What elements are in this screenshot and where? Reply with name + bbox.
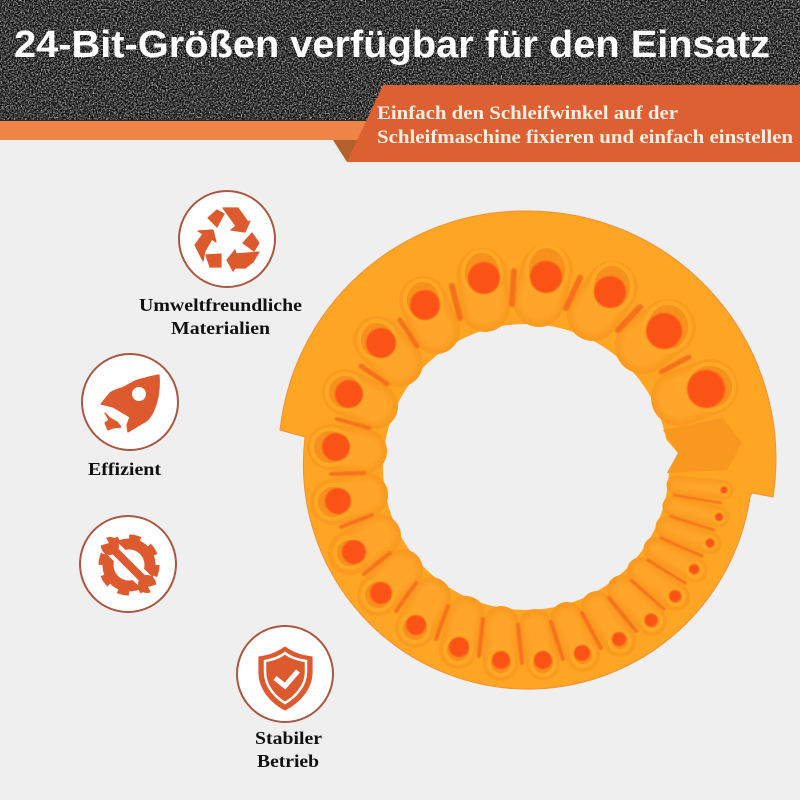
feature: stable operation bbox=[237, 626, 333, 771]
banner text line 1: Einfach den Schleifwinkel auf der bbox=[377, 103, 679, 124]
gear bbox=[102, 538, 156, 592]
deep red-orange hole interiors bbox=[322, 261, 728, 669]
banner fold bbox=[333, 140, 358, 162]
icon: shield with check bbox=[237, 626, 333, 722]
label: stable operation: Stabiler bbox=[255, 728, 322, 748]
icon: rocket bbox=[82, 354, 178, 450]
title: 24-Bit-Größen verfügbar für den Einsatz bbox=[14, 24, 770, 66]
wrench bbox=[97, 534, 160, 596]
grooves between tubes bbox=[331, 271, 721, 663]
product: orange circular bit holder bbox=[280, 211, 776, 689]
feature: eco materials bbox=[139, 191, 302, 338]
label: stable operation: Betrieb bbox=[257, 751, 319, 771]
label: efficient: Effizient bbox=[88, 459, 161, 479]
soft tube highlights bbox=[330, 270, 724, 663]
hole mouths with rims bbox=[312, 246, 734, 675]
holder centre opening bbox=[383, 324, 678, 610]
holder outer body bbox=[280, 211, 776, 689]
light orange strip bbox=[0, 121, 370, 140]
label: eco materials: Umweltfreundliche bbox=[139, 295, 302, 315]
tube bodies bbox=[330, 270, 724, 663]
icon: recycle bbox=[179, 191, 275, 287]
feature: tools icon bbox=[80, 516, 176, 612]
label: eco materials: Materialien bbox=[171, 318, 270, 338]
feature: efficient bbox=[82, 354, 178, 479]
flat hexagonal wedge segment bbox=[663, 418, 742, 473]
banner text line 2: Schleifmaschine fixieren und einfach einstellen bbox=[377, 127, 793, 148]
label: eco materials bbox=[139, 295, 302, 338]
header: dark textured background bbox=[0, 0, 800, 121]
subtitle banner bbox=[347, 85, 800, 162]
label: stable operation bbox=[255, 728, 322, 771]
